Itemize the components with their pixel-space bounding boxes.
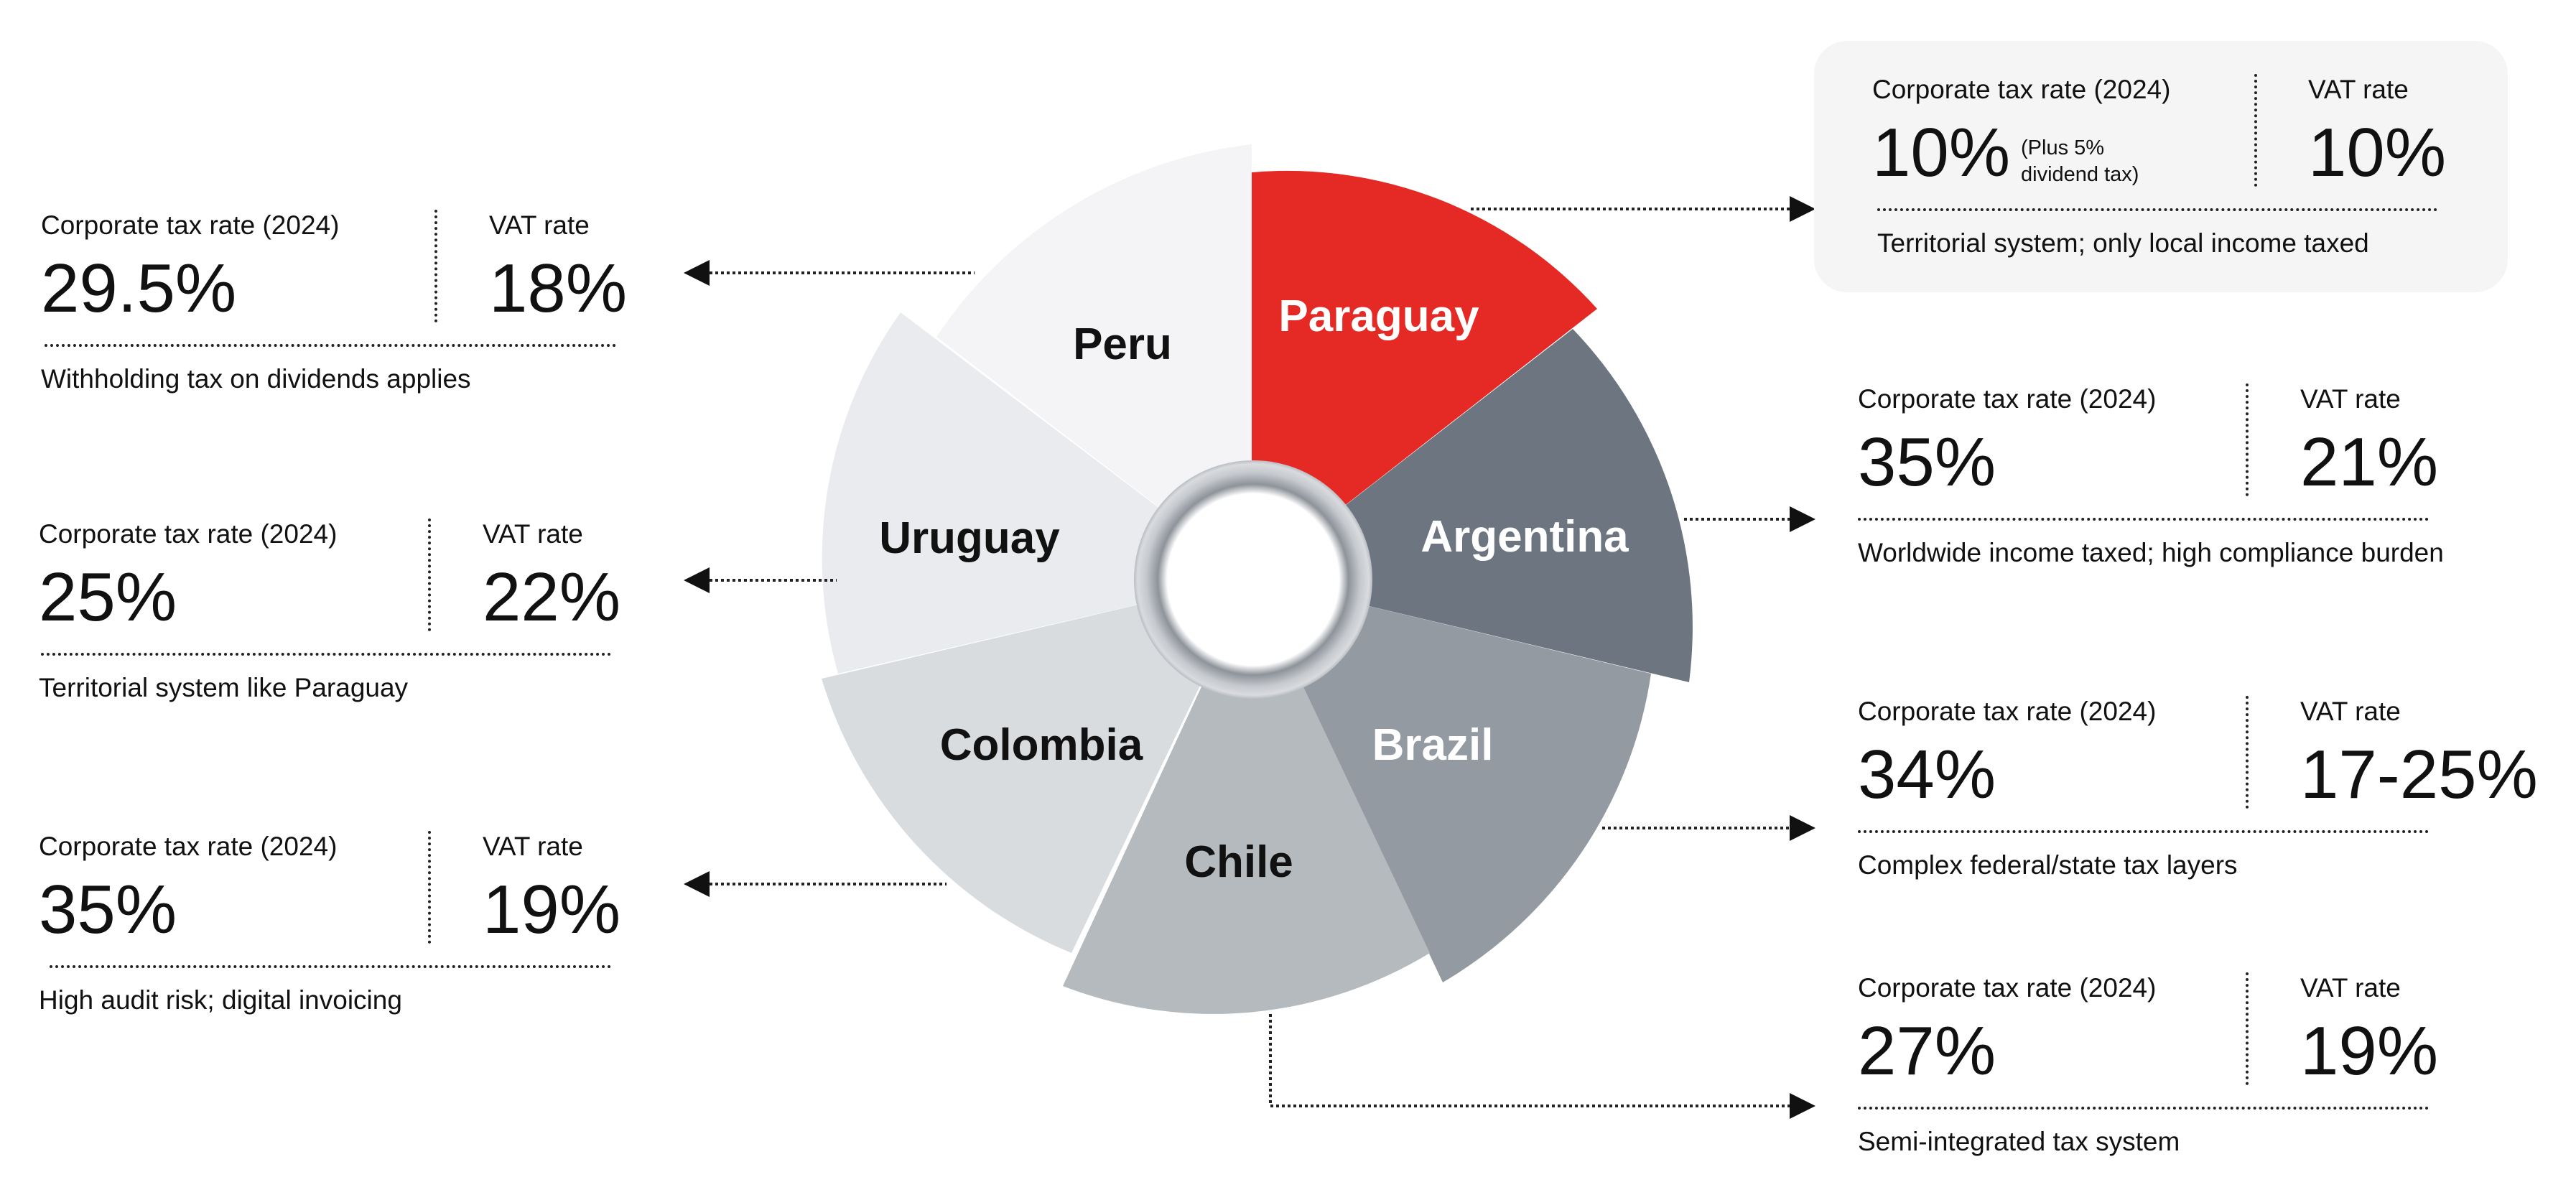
number: VAT: 19% bbox=[483, 871, 620, 948]
arrow: Uruguay bbox=[684, 567, 837, 593]
panel: Brazil bbox=[1858, 696, 2538, 880]
label: VAT: VAT rate bbox=[2308, 75, 2409, 104]
note: Worldwide income taxed; high compliance burden bbox=[1858, 538, 2444, 567]
number: corporate: 34% bbox=[1858, 736, 1996, 813]
note: dividend tax: (Plus 5% bbox=[2021, 136, 2104, 159]
label: corporate: Corporate tax rate (2024) bbox=[41, 210, 339, 240]
sector: Chile bbox=[1063, 578, 1430, 1014]
note: High audit risk; digital invoicing bbox=[39, 985, 402, 1015]
number: corporate: 27% bbox=[1858, 1013, 1996, 1089]
sector: Peru bbox=[936, 144, 1252, 578]
label: corporate: Corporate tax rate (2024) bbox=[1872, 75, 2170, 104]
label: VAT: VAT rate bbox=[483, 519, 583, 549]
panel: Paraguay bbox=[1872, 74, 2446, 258]
note: Semi-integrated tax system bbox=[1858, 1127, 2180, 1156]
label: corporate: Corporate tax rate (2024) bbox=[1858, 973, 2156, 1003]
label: VAT: VAT rate bbox=[2300, 384, 2401, 414]
number: VAT: 19% bbox=[2300, 1013, 2438, 1089]
number: corporate: 35% bbox=[1858, 424, 1996, 501]
arrow: Paraguay bbox=[1471, 196, 1815, 222]
note: Territorial system like Paraguay bbox=[39, 673, 408, 702]
arrow: Peru bbox=[684, 260, 975, 286]
number: VAT: 18% bbox=[489, 250, 627, 327]
number: VAT: 10% bbox=[2308, 114, 2446, 191]
arrow: Colombia bbox=[684, 871, 947, 897]
label: VAT: VAT rate bbox=[489, 210, 590, 240]
sector: Chile: Chile bbox=[1184, 837, 1293, 887]
number: corporate: 25% bbox=[39, 559, 177, 636]
sector: Paraguay: Paraguay bbox=[1278, 292, 1479, 341]
note: Complex federal/state tax layers bbox=[1858, 850, 2238, 880]
number: corporate: 35% bbox=[39, 871, 177, 948]
panel: Colombia bbox=[39, 831, 620, 1015]
panel: Chile bbox=[1858, 972, 2438, 1156]
number: VAT: 22% bbox=[483, 559, 620, 636]
label: corporate: Corporate tax rate (2024) bbox=[1858, 697, 2156, 726]
panel: Uruguay bbox=[39, 519, 620, 702]
arrow: Brazil bbox=[1602, 815, 1815, 841]
sector: Brazil: Brazil bbox=[1372, 720, 1493, 770]
sector: Colombia: Colombia bbox=[940, 720, 1143, 770]
center ring bbox=[1134, 460, 1372, 699]
label: corporate: Corporate tax rate (2024) bbox=[39, 832, 337, 861]
panel: Argentina bbox=[1858, 383, 2444, 567]
number: VAT: 17-25% bbox=[2300, 736, 2538, 813]
arrow: Chile bbox=[1270, 1014, 1815, 1119]
label: VAT: VAT rate bbox=[483, 832, 583, 861]
panel background: Paraguay bbox=[1814, 41, 2508, 292]
sector: Uruguay bbox=[822, 312, 1252, 674]
number: corporate: 29.5% bbox=[41, 250, 236, 327]
label: corporate: Corporate tax rate (2024) bbox=[1858, 384, 2156, 414]
note: Withholding tax on dividends applies bbox=[41, 364, 471, 394]
number: corporate: 10% bbox=[1872, 114, 2010, 191]
sector: Colombia bbox=[822, 578, 1252, 953]
label: VAT: VAT rate bbox=[2300, 973, 2401, 1003]
number: VAT: 21% bbox=[2300, 424, 2438, 501]
sector: Argentina bbox=[1252, 329, 1693, 682]
note: Territorial system; only local income taxed bbox=[1877, 228, 2369, 258]
note: dividend tax: dividend tax) bbox=[2021, 163, 2139, 186]
label: corporate: Corporate tax rate (2024) bbox=[39, 519, 337, 549]
sector: Uruguay: Uruguay bbox=[879, 513, 1060, 563]
sector: Brazil bbox=[1252, 578, 1651, 982]
sector: Paraguay bbox=[1252, 171, 1597, 578]
label: VAT: VAT rate bbox=[2300, 697, 2401, 726]
panel: Peru bbox=[41, 210, 627, 394]
note: dividend tax bbox=[2021, 136, 2139, 186]
arrow: Argentina bbox=[1684, 506, 1815, 532]
sector: Argentina: Argentina bbox=[1420, 512, 1629, 562]
sector: Peru: Peru bbox=[1073, 320, 1172, 369]
